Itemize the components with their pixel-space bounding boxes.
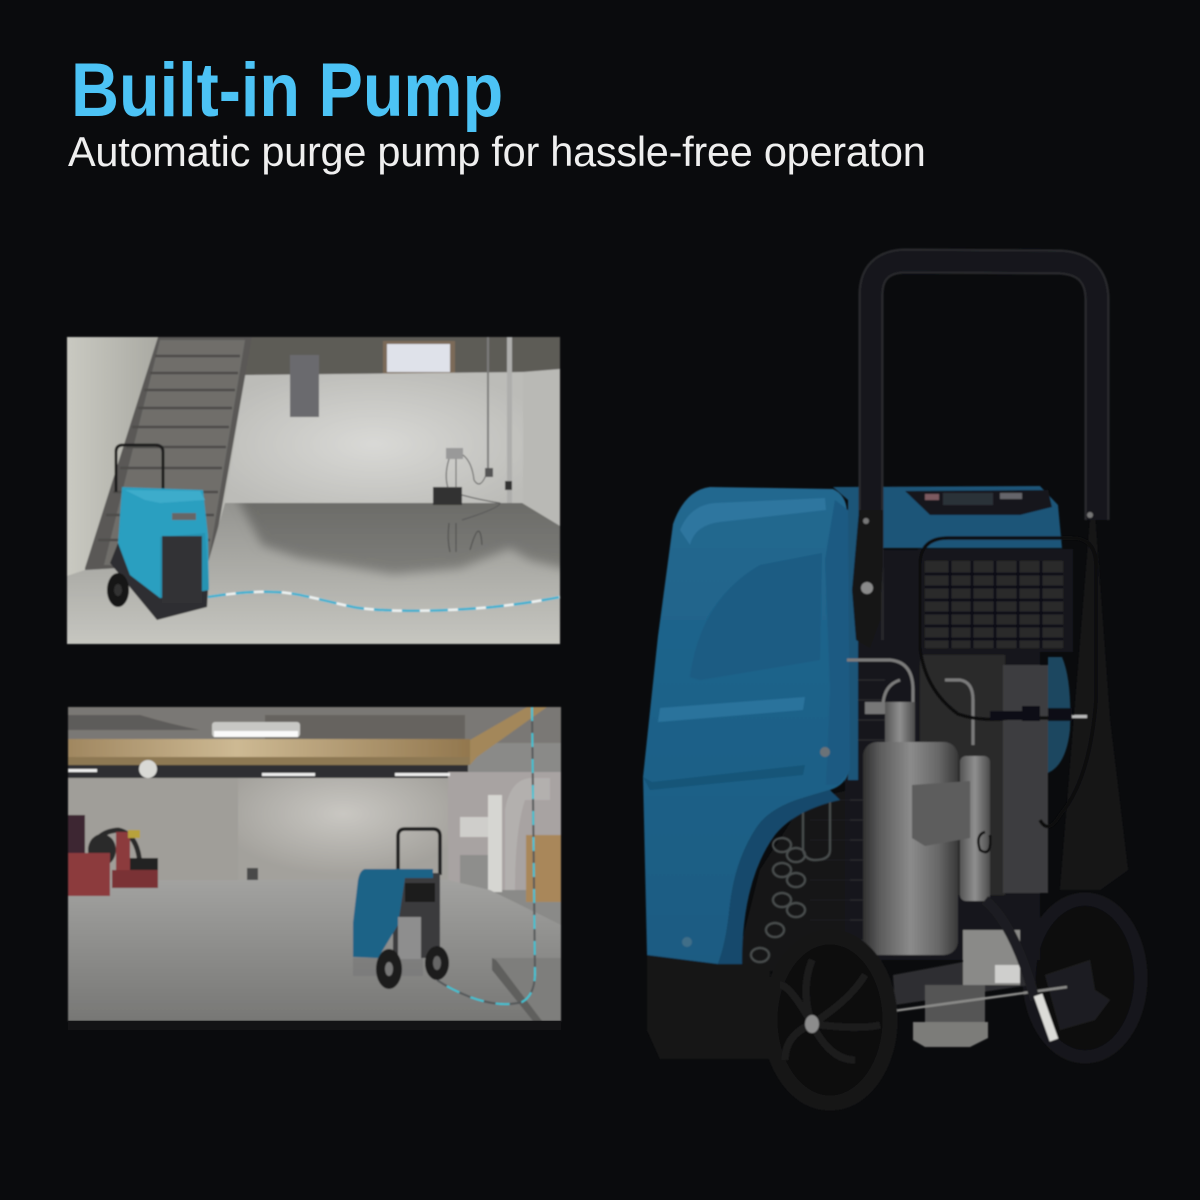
drain hose and fitting — [985, 900, 1054, 1040]
top blue casing — [833, 486, 1062, 780]
front wheel — [770, 937, 890, 1103]
power cord — [920, 538, 1096, 826]
base plate and pump — [893, 930, 1067, 1047]
sump box and outlet — [433, 448, 512, 552]
hose — [437, 707, 535, 1004]
electrical panel — [290, 355, 319, 417]
flood water — [236, 502, 560, 578]
shadow strip under garage — [68, 1021, 561, 1030]
dark coil zone — [740, 790, 850, 975]
hose — [208, 592, 560, 611]
small dehumidifier — [107, 445, 209, 620]
panel: basement scene — [67, 337, 590, 644]
piping — [847, 660, 973, 745]
panel: garage scene — [68, 707, 561, 1021]
garage floor — [68, 880, 561, 1021]
copper coils — [751, 795, 830, 962]
power plug — [990, 706, 1087, 721]
handle bracket — [852, 510, 883, 648]
lower dark body — [647, 955, 770, 1059]
title: Built-in Pump — [71, 48, 503, 133]
crate — [526, 835, 561, 902]
condenser fins — [810, 680, 885, 940]
stairs — [85, 337, 252, 590]
blue front shell — [643, 487, 850, 964]
grille — [918, 549, 1073, 652]
illustration: large dehumidifier cutaway — [643, 261, 1141, 1103]
tyre machine — [68, 815, 158, 896]
subtitle: Automatic purge pump for hassle-free operaton — [68, 128, 926, 175]
small dehumidifier — [353, 829, 449, 989]
internal bay — [845, 550, 1040, 960]
control panel — [905, 490, 1052, 515]
compressor tanks — [863, 702, 990, 955]
rear wheel — [1029, 899, 1141, 1057]
handle — [871, 261, 1097, 640]
wooden beam — [68, 707, 547, 765]
floor — [67, 503, 560, 644]
rear dark body — [1060, 515, 1128, 890]
ceiling lights — [68, 722, 450, 778]
